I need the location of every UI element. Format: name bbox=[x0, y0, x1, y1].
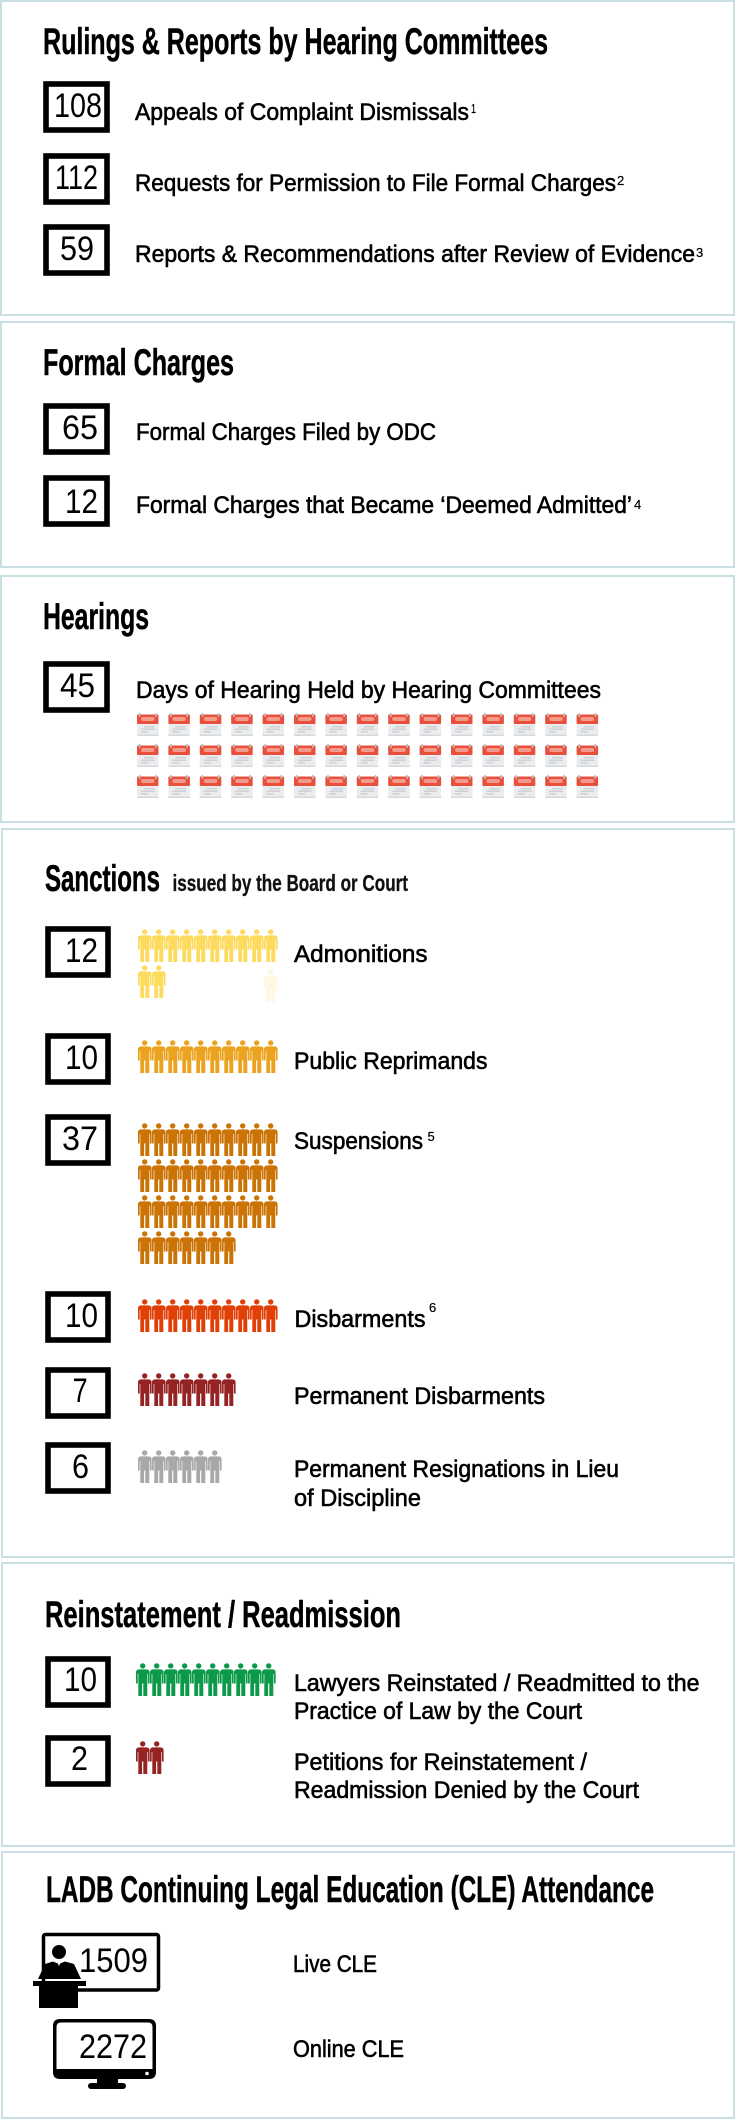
stat: 10 public reprimands: 10 bbox=[65, 1039, 98, 1077]
stat: 2 petitions denied: 2 bbox=[71, 1740, 88, 1778]
heading: Sanctions issued by the Board or Court: issued by the Board or Court bbox=[172, 870, 408, 896]
heading: Hearings: Hearings bbox=[43, 596, 149, 637]
icon: monitor showing 2272 bbox=[53, 2019, 156, 2089]
stat: 2 petitions denied: Readmission Denied by the Court bbox=[294, 1777, 639, 1804]
icons: orange people, suspensions bbox=[138, 1123, 278, 1264]
stat: 59 reports bbox=[46, 227, 703, 273]
label: Online CLE: Online CLE bbox=[293, 2036, 404, 2063]
icons: green people, reinstated bbox=[136, 1663, 276, 1696]
stat: 12 deemed admitted: Formal Charges that Became ‘Deemed Admitted’ bbox=[136, 492, 632, 519]
stat: 7 permanent disbarments: 7 bbox=[73, 1372, 88, 1410]
stat: 10 lawyers reinstated: Lawyers Reinstated / Readmitted to the bbox=[294, 1670, 700, 1697]
stat: 37 suspensions: 5 bbox=[428, 1129, 435, 1144]
panel: LADB Continuing Legal Education Attendance bbox=[2, 1852, 734, 2118]
panel: Sanctions bbox=[2, 829, 734, 1557]
stat: 6 permanent resignations: of Discipline bbox=[294, 1485, 421, 1512]
icons: dark red people, permanent disbarments bbox=[138, 1373, 236, 1406]
stat: 108 appeals: 1 bbox=[471, 101, 476, 116]
stat: 10 disbarments bbox=[48, 1294, 436, 1340]
stat: 10 public reprimands bbox=[48, 1036, 488, 1082]
stat: 108 appeals: Appeals of Complaint Dismissals bbox=[135, 99, 469, 126]
panel: Rulings & Reports by Hearing Committees bbox=[1, 1, 734, 315]
icons: gray people, permanent resignations bbox=[138, 1450, 222, 1483]
icon: presenter at podium with screen showing 1509: 1509 bbox=[79, 1942, 148, 1980]
stat: 6 permanent resignations: 6 bbox=[72, 1448, 89, 1486]
icon: presenter at podium with screen showing 1509 bbox=[33, 1934, 158, 2008]
stat: 37 suspensions bbox=[48, 1117, 435, 1163]
stat: 112 requests: 2 bbox=[617, 173, 624, 188]
stat: 108 appeals: 108 bbox=[54, 87, 102, 125]
stat: 7 permanent disbarments bbox=[48, 1370, 545, 1416]
stat: 59 reports: Reports & Recommendations after Review of Evidence bbox=[135, 241, 695, 268]
stat: 12 admonitions bbox=[48, 929, 428, 975]
stat: 112 requests bbox=[46, 156, 624, 202]
icons: amber people, public reprimands bbox=[138, 1040, 278, 1073]
stat: 65 formal charges filed: 65 bbox=[62, 409, 98, 447]
icons: 45 calendars bbox=[137, 713, 598, 798]
stat: 12 admonitions: 12 bbox=[65, 932, 98, 970]
heading: Sanctions issued by the Board or Court bbox=[45, 858, 408, 899]
icons: red people, disbarments bbox=[138, 1299, 278, 1332]
stat: 10 disbarments: Disbarments bbox=[294, 1306, 426, 1333]
icon: monitor showing 2272: 2272 bbox=[79, 2028, 147, 2066]
stat: 65 formal charges filed: Formal Charges Filed by ODC bbox=[136, 419, 436, 446]
stat: 10 public reprimands: Public Reprimands bbox=[294, 1048, 488, 1075]
stat: 2 petitions denied: Petitions for Reinstatement / bbox=[294, 1749, 587, 1776]
stat: 112 requests: 112 bbox=[55, 159, 98, 197]
stat: 12 deemed admitted bbox=[46, 478, 641, 524]
icons: dark red people, denied bbox=[136, 1741, 164, 1774]
icons: yellow people, admonitions bbox=[138, 929, 278, 1002]
stat: 65 formal charges filed bbox=[46, 406, 436, 452]
stat: 10 lawyers reinstated: Practice of Law by the Court bbox=[294, 1698, 582, 1725]
stat: 108 appeals bbox=[46, 84, 476, 130]
stat: 10 disbarments: 10 bbox=[65, 1297, 98, 1335]
stat: 6 permanent resignations: Permanent Resignations in Lieu bbox=[294, 1456, 619, 1483]
stat: 45 days of hearing: 45 bbox=[60, 667, 95, 705]
stat: 59 reports: 3 bbox=[696, 245, 703, 260]
stat: 12 deemed admitted: 12 bbox=[65, 483, 98, 521]
panel: Hearings bbox=[1, 576, 734, 822]
stat: 45 days of hearing: Days of Hearing Held by Hearing Committees bbox=[136, 677, 601, 704]
stat: 2 petitions denied bbox=[48, 1738, 639, 1804]
heading: Sanctions issued by the Board or Court: Sanctions bbox=[45, 858, 160, 899]
stat: 112 requests: Requests for Permission to File Formal Charges bbox=[135, 170, 616, 197]
stat: 10 disbarments: 6 bbox=[429, 1300, 436, 1315]
stat: 12 admonitions: Admonitions bbox=[294, 941, 428, 968]
label: Live CLE: Live CLE bbox=[293, 1951, 377, 1978]
stat: 10 lawyers reinstated: 10 bbox=[64, 1661, 97, 1699]
stat: 7 permanent disbarments: Permanent Disbarments bbox=[294, 1383, 545, 1410]
panel: Reinstatement / Readmission bbox=[2, 1563, 734, 1846]
stat: 45 days of hearing bbox=[46, 664, 601, 710]
stat: 59 reports: 59 bbox=[60, 230, 94, 268]
stat: 12 deemed admitted: 4 bbox=[634, 497, 641, 512]
heading: Formal Charges: Formal Charges bbox=[43, 342, 234, 383]
stat: 37 suspensions: 37 bbox=[62, 1120, 98, 1158]
panel: Formal Charges bbox=[1, 322, 734, 567]
stat: 6 permanent resignations bbox=[48, 1445, 619, 1512]
stat: 10 lawyers reinstated bbox=[48, 1659, 700, 1725]
heading: Reinstatement / Readmission: Reinstatement / Readmission bbox=[45, 1594, 401, 1635]
stat: 37 suspensions: Suspensions bbox=[294, 1128, 423, 1155]
